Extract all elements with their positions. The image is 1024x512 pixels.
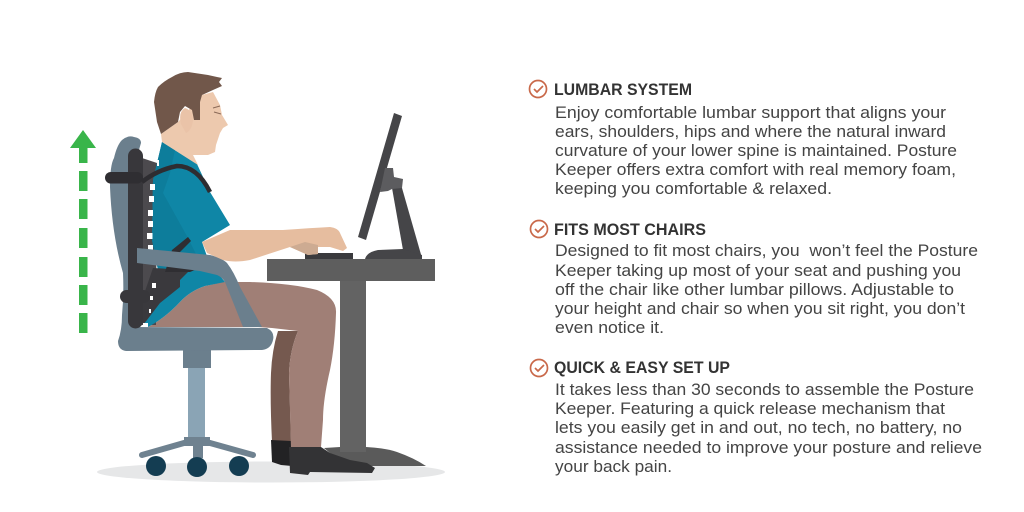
section: lumbar system (530, 80, 957, 198)
lumbar support device (105, 156, 214, 327)
front shoe (289, 447, 375, 475)
body text: fits most chairs: Keeper taking up most of your seat and pushing you (555, 262, 961, 280)
heading: fits most chairs: FITS MOST CHAIRS (554, 221, 706, 239)
desk (267, 259, 435, 466)
lumbar panel behind torso (142, 158, 157, 325)
body text: quick and easy set up: It takes less than 30 seconds to assemble the Posture (555, 381, 974, 399)
thigh and front leg (148, 282, 336, 448)
body text: lumbar system: Keeper offers extra comfort with real memory foam, (555, 161, 956, 179)
chair (110, 136, 273, 458)
body text: lumbar system (555, 104, 957, 198)
body text: fits most chairs: even notice it. (555, 319, 664, 337)
shirt (143, 142, 230, 327)
monitor (358, 113, 422, 259)
head (154, 72, 228, 165)
body text: lumbar system: ears, shoulders, hips and where the natural inward (555, 123, 946, 141)
body text: lumbar system: curvature of your lower spine is maintained. Posture (555, 142, 957, 160)
icon: check circle (530, 220, 548, 238)
section: fits most chairs (530, 220, 978, 337)
keyboard (305, 253, 353, 259)
back shoe (271, 440, 292, 466)
section: quick and easy set up (530, 359, 982, 476)
body text: quick and easy set up (555, 381, 982, 476)
heading: lumbar system: LUMBAR SYSTEM (554, 81, 692, 99)
green upward dashed arrow (70, 130, 96, 333)
illustration: person seated at desk (70, 72, 445, 482)
body text: lumbar system: Enjoy comfortable lumbar support that aligns your (555, 104, 947, 122)
body text: lumbar system: keeping you comfortable & relaxed. (555, 180, 832, 198)
body text: quick and easy set up: assistance needed to improve your posture and relieve (555, 439, 982, 457)
chair wheels (146, 456, 249, 477)
back leg (271, 331, 298, 442)
icon: check circle (530, 360, 548, 376)
arm (202, 227, 347, 262)
body text: quick and easy set up: your back pain. (555, 458, 672, 476)
body text: quick and easy set up: Keeper. Featuring a quick release mechanism that (555, 400, 945, 418)
body text: fits most chairs: your height and chair so when you sit right, you don’t (555, 300, 965, 318)
armrest (137, 248, 262, 327)
icon: check circle (530, 80, 546, 98)
floor shadow (97, 462, 445, 482)
body text: fits most chairs: off the chair like other lumbar pillows. Adjustable to (555, 281, 954, 299)
body text: fits most chairs: Designed to fit most chairs, you won’t feel the Posture (555, 242, 978, 260)
heading: quick and easy set up: QUICK & EASY SET UP (554, 359, 730, 377)
body text: fits most chairs (555, 242, 978, 337)
body text: quick and easy set up: lets you easily get in and out, no tech, no battery, no (555, 419, 962, 437)
